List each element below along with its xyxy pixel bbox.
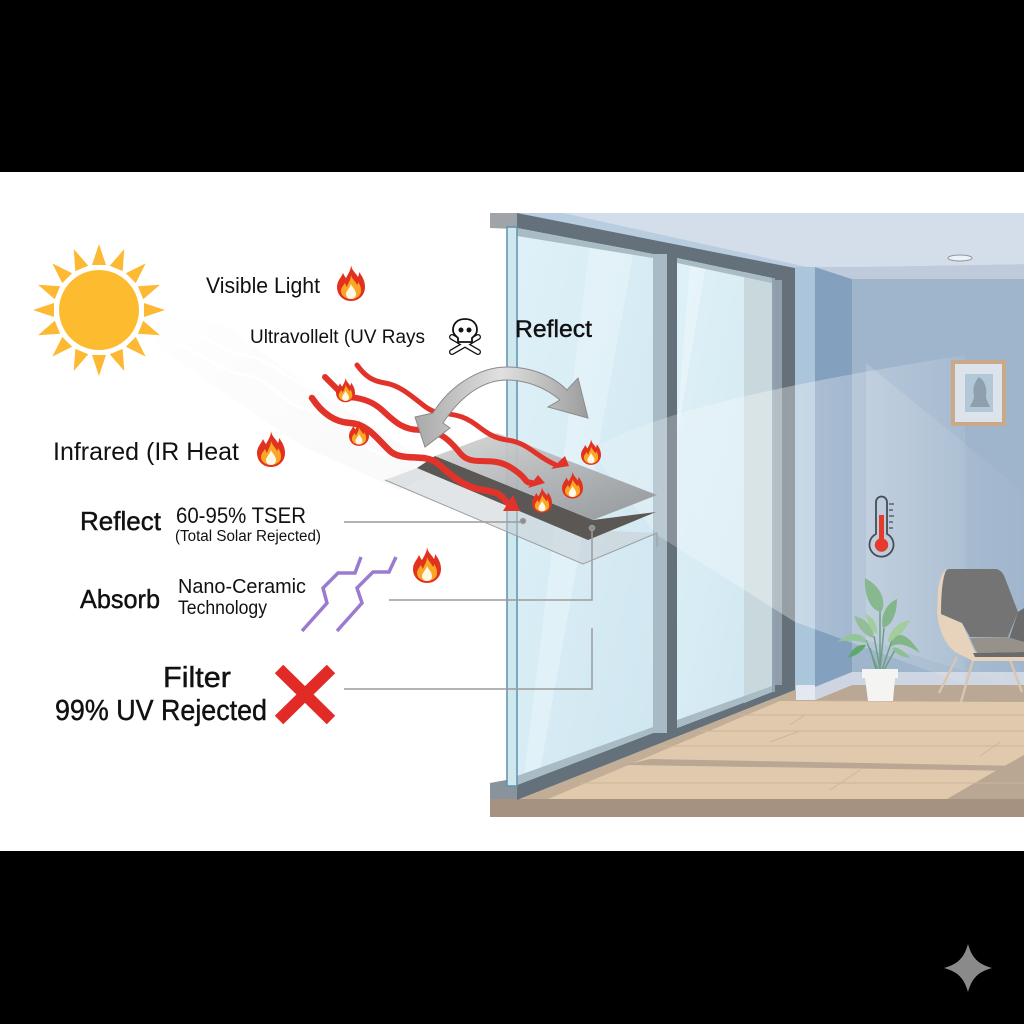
glass edge [507, 227, 517, 786]
middle dark layer [417, 456, 656, 540]
detail: Nano-Ceramic [178, 576, 306, 598]
detail: 99% UV Rejected [55, 695, 267, 727]
window [490, 213, 795, 817]
red wave arrows [312, 365, 569, 511]
sparkle watermark [944, 944, 992, 992]
floor back strip [780, 685, 1024, 702]
plant [837, 578, 920, 701]
skirting [796, 672, 1024, 700]
label: ultraviolet: Ultravollelt (UV Rays [250, 327, 425, 348]
room interior [490, 213, 1024, 817]
flame [349, 420, 369, 446]
icon: flame visible light [337, 265, 365, 301]
wall picture [951, 360, 1006, 426]
thermometer icon [870, 496, 894, 557]
back wall [852, 279, 1024, 679]
lower clear layer [385, 468, 657, 564]
armchair [937, 569, 1024, 702]
curved grey reflect arrow [415, 367, 588, 447]
connector lines [344, 518, 594, 689]
note: (Total Solar Rejected) [175, 528, 321, 545]
ceiling [517, 213, 1024, 268]
flame [336, 378, 355, 402]
purple zigzag rays [302, 557, 396, 631]
light stream from sun [155, 315, 440, 490]
plant pot [862, 669, 898, 701]
floor base band [490, 799, 1024, 817]
light beam [590, 355, 965, 684]
film layers [385, 433, 657, 564]
floor shadow [947, 755, 1024, 799]
ceiling edge band [517, 213, 812, 268]
secondary beam [866, 363, 1024, 690]
flame [581, 439, 601, 465]
white panel [0, 172, 1024, 851]
filter row [55, 662, 267, 727]
frame outer [517, 213, 795, 800]
ceiling light [948, 255, 972, 261]
icon: flame infrared [257, 431, 285, 467]
side wall [815, 267, 852, 695]
top grey layer [435, 433, 657, 520]
floor shadow base [517, 690, 1024, 800]
label: visible light: Visible Light [206, 273, 320, 298]
heading: Filter [163, 662, 231, 694]
pillar [795, 267, 815, 693]
reflect row [80, 503, 321, 545]
flame [562, 472, 583, 498]
heading: Reflect [80, 506, 162, 536]
label: infrared: Infrared (IR Heat [53, 438, 239, 466]
detail: Technology [178, 598, 267, 619]
icon: red x [279, 669, 331, 720]
value: 60-95% TSER [176, 503, 306, 528]
absorb row [80, 576, 306, 619]
frame left block [490, 213, 517, 229]
ceiling cornice [815, 264, 1024, 279]
small flames on arrows [336, 378, 601, 513]
heading: Absorb [80, 584, 160, 614]
left glass pane [517, 228, 653, 785]
right glass pane [677, 258, 772, 728]
icon: skull and crossbones [452, 319, 478, 352]
icon: flame absorb [413, 547, 441, 583]
flame [532, 487, 552, 513]
sun icon [33, 244, 165, 376]
label: reflect on window: Reflect [515, 316, 592, 343]
floor [548, 701, 1024, 799]
mullion light [653, 254, 667, 733]
